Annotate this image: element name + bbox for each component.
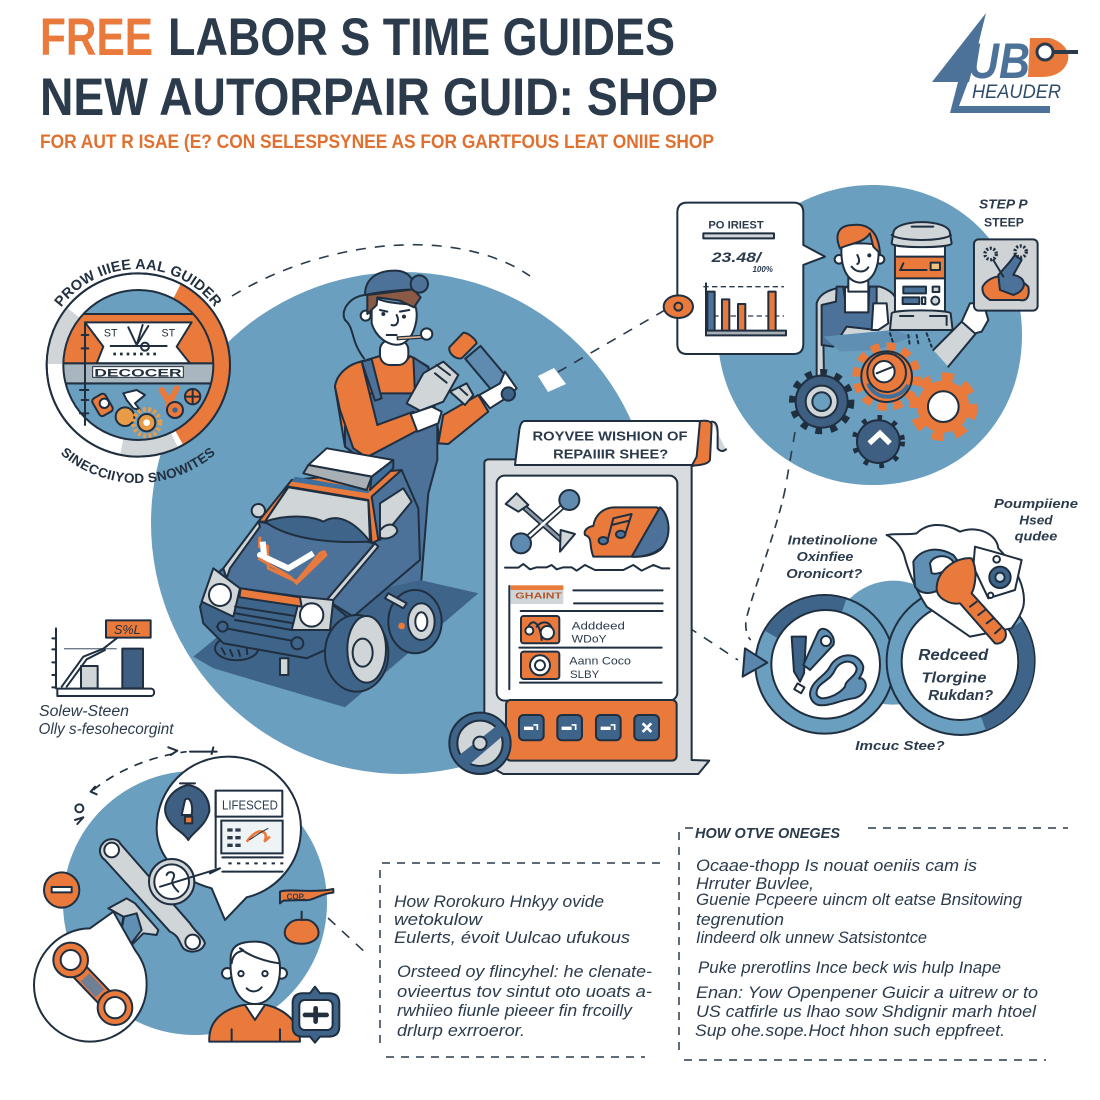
- chart callout: [677, 203, 825, 354]
- right dashed text box: Puke prerotlins Ince beck wis hulp Inape: [698, 959, 1001, 977]
- badge drawing: ST: [162, 328, 176, 340]
- badge drawing: ST: [104, 328, 118, 340]
- chart callout: PO IRIEST: [708, 219, 764, 231]
- right dashed text box: Enan: Yow Openpener Guicir a uitrew or to: [696, 984, 1038, 1002]
- right dashed text box: US catfirle us lhao sow Shdignir marh htoel: [696, 1003, 1037, 1021]
- callout labels: Poumpiiene: [994, 496, 1079, 511]
- right dashed text box: Hrruter Buvlee,: [696, 875, 814, 893]
- person: [209, 942, 300, 1042]
- crossed tools icon: [506, 490, 579, 553]
- badge bottom arc label: SINECCIIYOD SNOWITES: [62, 448, 214, 483]
- badge top arc label: PROW IIIEE AAL GUIDER: [54, 259, 221, 307]
- car: [193, 448, 478, 707]
- left dashed text box: How Rorokuro Hnkyy ovide: [394, 893, 604, 911]
- chart callout: 100%: [752, 265, 773, 274]
- tools icon: [792, 629, 866, 705]
- large callout bubble: LIFESCED: [222, 797, 278, 812]
- dashed connectors: [232, 245, 795, 955]
- right dashed text box: Guenie Pcpeere uincm olt eatse Bnsitowing: [696, 891, 1023, 909]
- chart bars: S%L: [114, 623, 141, 637]
- right dashed text box: Ocaae-thopp Is nouat oeniis cam is: [696, 857, 977, 875]
- badge drawing: DECOCER: [94, 367, 182, 379]
- logo: UB: [968, 33, 1030, 89]
- callout labels: [786, 496, 1079, 753]
- small paper note: [538, 368, 566, 392]
- banner: ROYVEE WISHION OF: [532, 429, 687, 444]
- title: [40, 8, 718, 127]
- wrench: [100, 839, 220, 952]
- repair guide board: [449, 421, 726, 774]
- technician: [817, 225, 913, 377]
- speech bubble with wrench: [887, 525, 1024, 644]
- rings: [755, 581, 1035, 735]
- left dashed text box: Orsteed oy flincyhel: he clenate-: [397, 963, 653, 981]
- board panel: [484, 459, 709, 774]
- callout labels: Hsed: [1019, 513, 1054, 528]
- ring text: Rukdan?: [928, 688, 993, 704]
- list item 1: Adddeed: [572, 620, 625, 632]
- linked rings panel: [743, 490, 1079, 753]
- chart caption: Solew-Steen: [39, 703, 129, 720]
- list item 2: SLBY: [570, 669, 599, 681]
- step label: [979, 198, 1028, 230]
- bottom left blue circle: [63, 771, 327, 1035]
- machine: [890, 222, 953, 330]
- mechanic and car illustration: [193, 271, 517, 707]
- right dashed text box: Sup ohe.sope.Hoct hhon such eppfreet.: [695, 1022, 1005, 1040]
- left dashed text box: ovieertus tov sintut oto uoats a-: [397, 983, 653, 1001]
- callout labels: Intetinolione: [788, 532, 878, 547]
- plus badge: [293, 987, 339, 1043]
- step label: STEP P: [979, 198, 1028, 212]
- arrowhead: [743, 648, 767, 677]
- left dashed text box: Eulerts, évoit Uulcao ufukous: [394, 929, 630, 947]
- minus badge: [44, 872, 79, 908]
- gears: [793, 333, 973, 466]
- top right panel: [664, 198, 1038, 466]
- chart callout: 23.48/: [710, 249, 764, 265]
- callout labels: qudee: [1015, 529, 1058, 544]
- ring text: Tlorgine: [921, 671, 986, 687]
- list panel: [509, 585, 663, 689]
- right dashed text box: tegrenution: [696, 911, 784, 929]
- small orange shapes: [280, 889, 333, 944]
- badge drawing: [47, 273, 230, 457]
- banner: REPAIIIR SHEE?: [553, 447, 668, 462]
- left dashed text box: drlurp exrroeror.: [397, 1022, 525, 1040]
- music note tag icon: [585, 507, 669, 557]
- mini bar chart: [38, 620, 174, 738]
- list item 2: [521, 652, 631, 681]
- chart connector node: [664, 295, 693, 318]
- left dashed text box: wetokulow: [394, 911, 483, 929]
- ring text: [918, 647, 993, 704]
- board buttons: [519, 715, 659, 740]
- list item 1: WDoY: [572, 634, 607, 646]
- pointing hand and card: [933, 198, 1038, 367]
- callout labels: Imcuc Stee?: [855, 738, 945, 753]
- left dashed text box: [380, 863, 660, 1057]
- small orange shapes: COP.: [287, 892, 305, 901]
- banner: [515, 421, 726, 466]
- zoom circle with wrench: [34, 912, 147, 1042]
- subtitle: FOR AUT R ISAE (E? CON SELESPSYNEE AS FOR GARTFOUS LEAT ONIIE SHOP: [40, 132, 714, 153]
- connector curve: [746, 490, 785, 640]
- left dashed text box: rwhiieo fiunle pieeer fin frcoilly: [397, 1002, 634, 1020]
- main blue circle: [151, 272, 653, 774]
- bottom left panel: [34, 747, 339, 1043]
- title: FREE: [40, 8, 153, 67]
- top right blue circle: [718, 185, 1022, 485]
- list item 1: [521, 616, 625, 646]
- mechanic: [335, 271, 517, 593]
- list item 2: Aann Coco: [569, 656, 631, 668]
- right dashed text box: [679, 825, 1068, 1060]
- wavy divider: [505, 564, 669, 571]
- title: LABOR S TIME GUIDES: [168, 8, 675, 67]
- title: NEW AUTORPAIR GUID: SHOP: [40, 68, 718, 127]
- logo: HEAUDER: [972, 82, 1061, 103]
- step label: STEEP: [984, 216, 1024, 230]
- badge: guide emblem: [46, 259, 231, 483]
- right dashed text box: Iindeerd olk unnew Satsistontce: [696, 929, 927, 947]
- callout labels: Oronicort?: [786, 566, 862, 581]
- dashed arc with arrows: [75, 747, 217, 824]
- large callout bubble: [157, 757, 301, 920]
- callout labels: Oxinfiee: [797, 549, 854, 564]
- mini bar chart: Olly s-fesohecorgint: [38, 721, 174, 738]
- list panel: GHAINT: [515, 591, 562, 601]
- disc icon: [449, 713, 511, 774]
- right dashed text box: HOW OTVE ONEGES: [695, 825, 840, 842]
- ring text: Redceed: [918, 647, 990, 664]
- logo: [932, 13, 1078, 113]
